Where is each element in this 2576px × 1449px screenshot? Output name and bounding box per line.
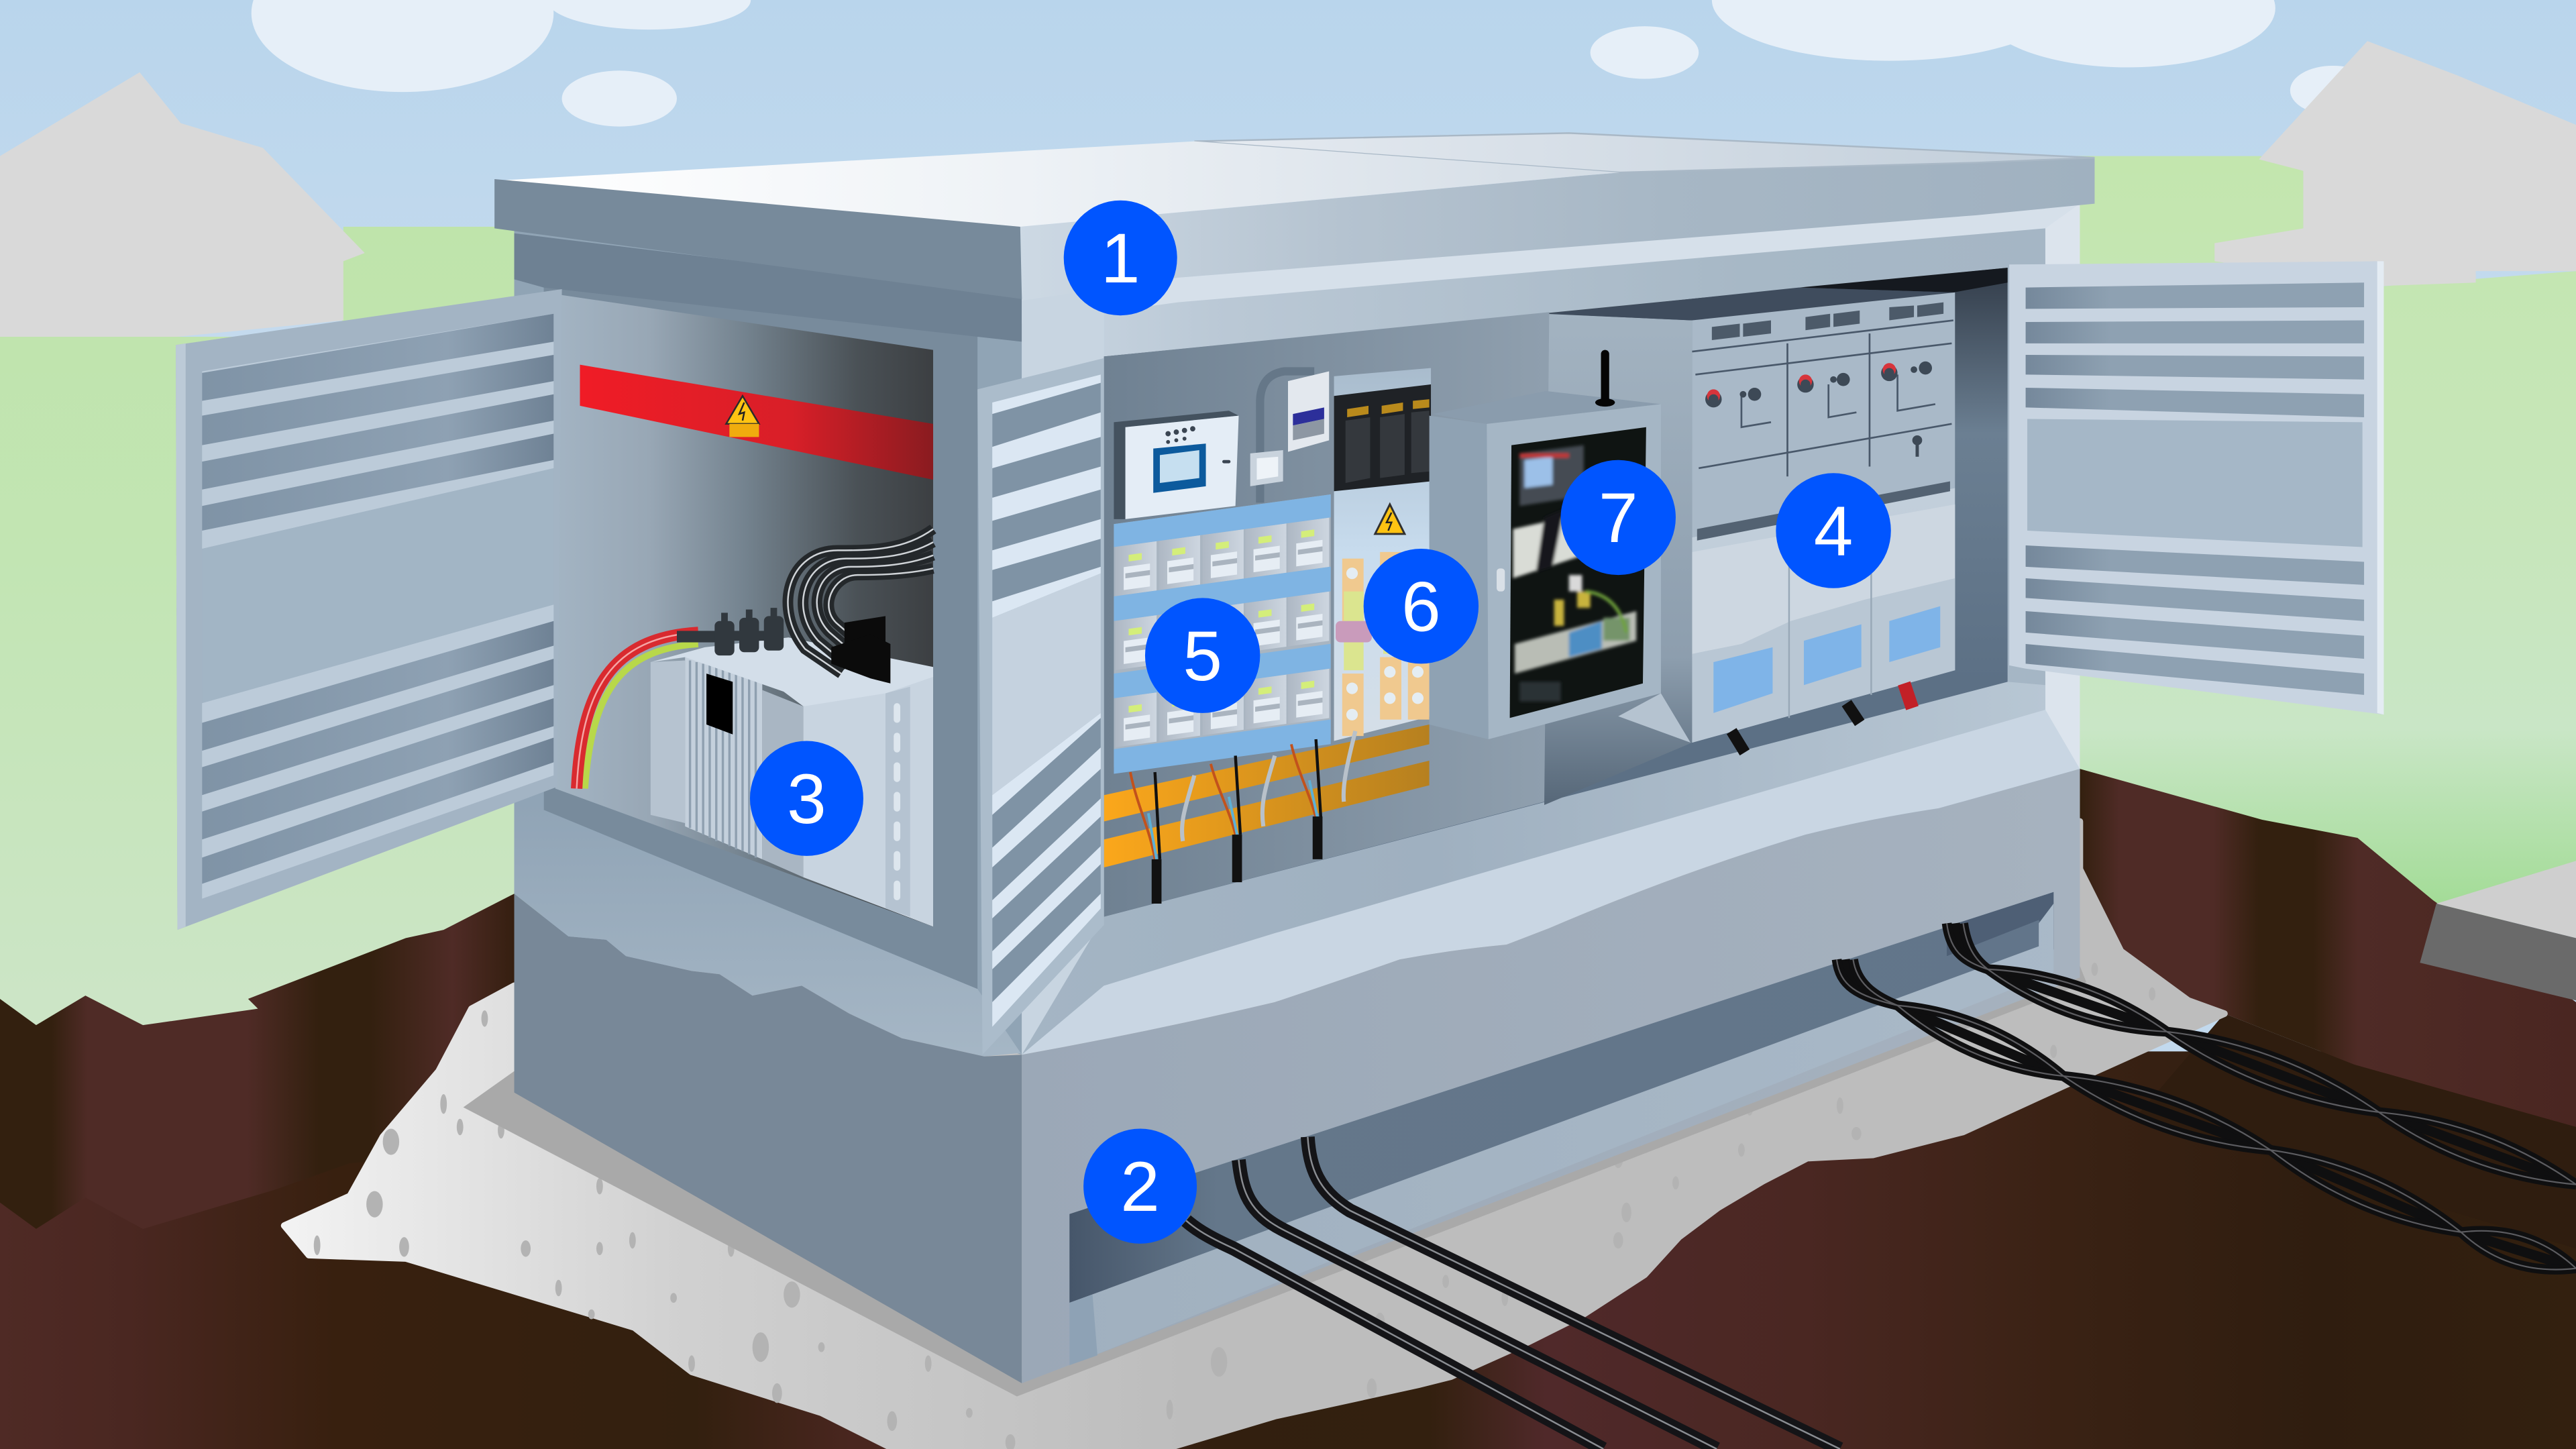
transformer mid face xyxy=(762,690,804,877)
mounting plate xyxy=(1334,368,1431,741)
house left xyxy=(0,72,365,337)
sky xyxy=(0,0,2576,493)
bushings xyxy=(677,608,784,655)
metering box xyxy=(1114,411,1239,519)
door edge xyxy=(176,343,186,930)
marker 4: switchgear xyxy=(1776,473,1891,588)
underground cable bundle back right xyxy=(1947,923,2576,1185)
door: right compartment right leaf xyxy=(2009,261,2383,714)
cabinet window xyxy=(1510,427,1646,718)
low voltage back panel xyxy=(1104,312,1549,917)
transformer right face xyxy=(804,674,933,926)
meter blocks xyxy=(1114,494,1331,773)
right light band xyxy=(1022,710,2080,1055)
cable clamp xyxy=(831,616,890,684)
transformer left block xyxy=(651,660,685,823)
conduit xyxy=(1260,371,1314,502)
left wall upper xyxy=(515,230,1022,1055)
outgoing feeder cables xyxy=(1130,731,1355,904)
soil shade right xyxy=(2136,1014,2576,1248)
cabinet handle xyxy=(1497,568,1505,592)
marker 3: transformer: 3 xyxy=(787,760,826,839)
right wall highlight under roof xyxy=(1022,204,2080,323)
left wall eave shade xyxy=(515,233,1022,341)
transformer xyxy=(651,637,933,926)
right sill xyxy=(1022,682,2045,1055)
dark separator xyxy=(1697,482,1950,541)
marker 5: meter blocks xyxy=(1145,598,1260,713)
right end column xyxy=(2045,204,2080,772)
compartment back xyxy=(1104,268,2008,917)
orange rails xyxy=(1104,724,1430,867)
dark upper back xyxy=(1799,268,2008,292)
right wall lower xyxy=(1022,769,2080,1383)
warning sign on bar xyxy=(726,396,759,437)
red warning bar xyxy=(580,365,933,480)
switchgear bottom xyxy=(1692,578,1955,743)
transformer top plate xyxy=(651,637,933,706)
marker 2: cable entry: 2 xyxy=(1120,1148,1160,1226)
switchgear upper panel xyxy=(1692,292,1955,537)
name plates xyxy=(1712,303,1943,340)
back soil right xyxy=(2080,769,2576,1127)
low voltage cable bundle xyxy=(788,529,933,674)
interior back wall xyxy=(555,294,933,926)
switchgear lower panel xyxy=(1692,488,1955,743)
clouds xyxy=(252,0,2375,127)
grass right xyxy=(2074,156,2576,920)
marker 6: fuse panel xyxy=(1364,549,1479,663)
roof xyxy=(494,133,2094,301)
pale shading upper xyxy=(1692,504,1955,657)
foreground soil xyxy=(0,1051,2576,1449)
door: left compartment xyxy=(176,289,562,930)
cable opening xyxy=(1069,892,2053,1303)
cabinet contents blurred xyxy=(1513,445,1636,702)
left wall frame xyxy=(544,246,977,989)
antenna xyxy=(1595,350,1615,407)
switchgear cables xyxy=(1731,684,1913,753)
small distribution box xyxy=(1288,371,1329,451)
marker 4: switchgear: 4 xyxy=(1814,492,1853,571)
cabinet shadow side xyxy=(1618,693,1690,743)
roof left plate xyxy=(494,142,1620,227)
louvre backing upper xyxy=(202,314,553,549)
panel dividers xyxy=(1789,501,1871,718)
left cable opening side xyxy=(1069,1295,1097,1365)
control cabinet xyxy=(1430,350,1690,743)
cable opening right recess xyxy=(1947,892,2053,956)
louvre slats xyxy=(202,314,553,884)
marker 2: cable entry xyxy=(1083,1128,1197,1244)
underground cables front xyxy=(1186,1137,1840,1449)
compartment mid back xyxy=(1544,314,1692,805)
blue label plates xyxy=(1713,606,1940,713)
cable opening lip xyxy=(1069,904,2053,1365)
grass left xyxy=(0,227,542,1051)
concrete block far right xyxy=(2420,861,2576,1000)
left corner column xyxy=(1022,289,1104,1055)
left wall lower xyxy=(515,894,1022,1383)
marker 5: meter blocks: 5 xyxy=(1183,617,1222,696)
medium voltage cables red xyxy=(577,633,698,789)
medium voltage switchgear xyxy=(1692,292,1955,753)
concrete foundation xyxy=(284,821,2224,1449)
warning triangle xyxy=(1375,504,1405,534)
left compartment interior xyxy=(555,294,933,926)
switchgear top plate xyxy=(1549,288,1953,321)
right compartment xyxy=(1104,268,2008,917)
marker 1: roof xyxy=(1064,201,1177,315)
switch knobs xyxy=(1705,362,1932,457)
right wall upper xyxy=(1022,213,2045,1055)
concrete specks xyxy=(314,963,2155,1449)
slab shadow xyxy=(464,966,2086,1397)
transformer fins xyxy=(685,657,762,859)
terminal chips xyxy=(1336,552,1430,736)
louvre backing lower xyxy=(202,604,553,899)
house right xyxy=(2214,41,2576,286)
enclosure xyxy=(515,204,2080,1383)
door: right compartment left leaf xyxy=(977,358,1104,1055)
roof left edge xyxy=(494,179,1022,299)
mounting channel xyxy=(885,687,910,917)
marker 6: fuse panel: 6 xyxy=(1401,568,1441,646)
marker 1: roof: 1 xyxy=(1101,219,1140,298)
door center panel xyxy=(202,468,553,703)
marker 7: control cabinet: 7 xyxy=(1599,479,1638,557)
fuse holder xyxy=(1334,384,1431,491)
left wall light lower band xyxy=(515,786,1022,1057)
cabinet side xyxy=(1430,416,1489,739)
roof right plate xyxy=(1194,133,2094,172)
underground cable bundle back left xyxy=(1837,959,2576,1270)
marker 3: transformer xyxy=(750,741,863,856)
marker 7: control cabinet xyxy=(1561,460,1676,575)
black sticker xyxy=(706,674,733,735)
cabinet front xyxy=(1487,404,1661,739)
section lines xyxy=(1692,321,1953,476)
cabinet top xyxy=(1433,391,1661,424)
small square switch xyxy=(1250,450,1283,486)
back soil left xyxy=(0,894,526,1229)
roof front band xyxy=(1020,158,2094,301)
